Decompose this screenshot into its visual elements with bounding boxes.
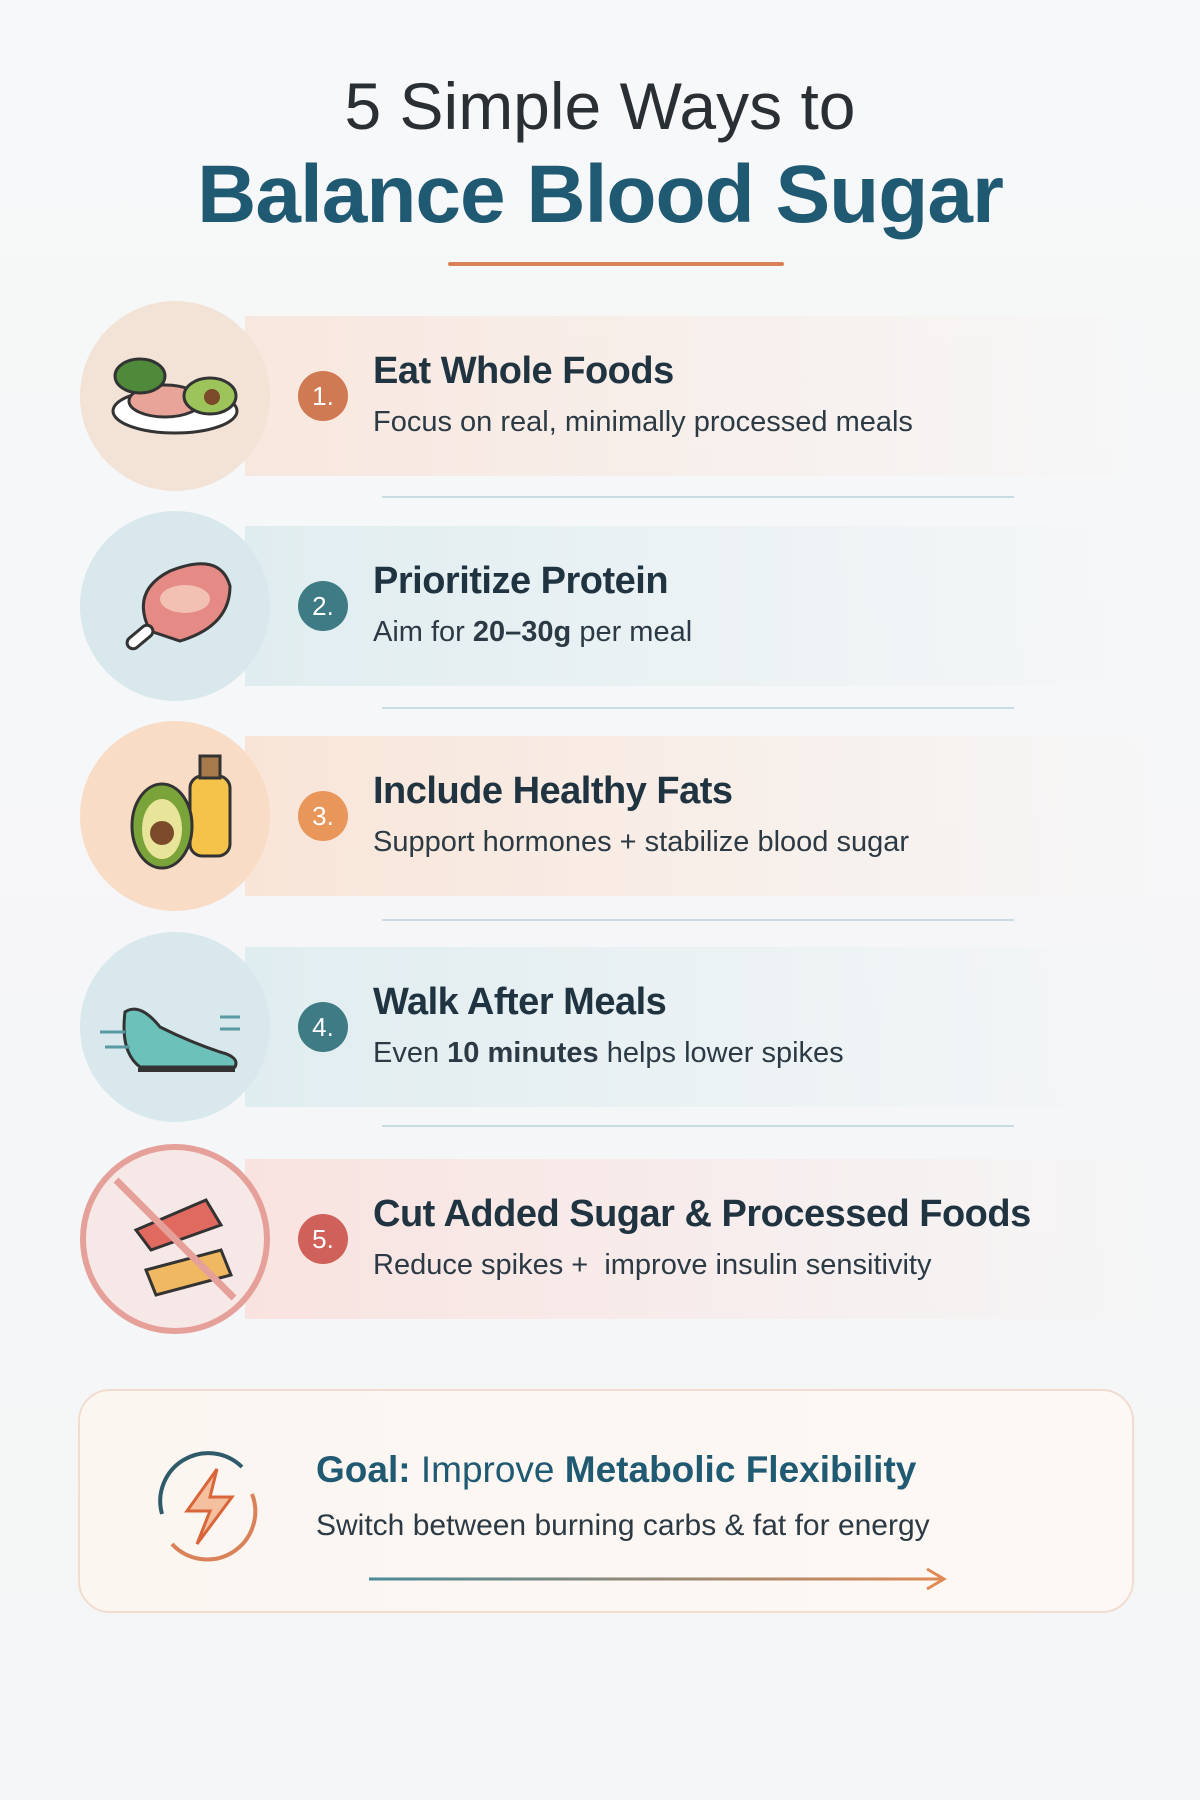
icon: energy cycle [158,1451,258,1562]
icon: protein steak [80,511,270,701]
badge 3: 3. [312,801,334,831]
badge 2: 2. [312,591,334,621]
badge 2 [298,581,348,631]
badge 4 [298,1002,348,1052]
row 2 [80,511,822,701]
title: Balance Blood Sugar [197,149,1003,240]
badge 1: 1. [312,381,334,411]
heading 5: Cut Added Sugar & Processed Foods [373,1193,1031,1235]
icon: sneaker [80,932,270,1122]
row 5 [80,1144,1031,1334]
row 3 [80,721,920,911]
title underline [448,262,784,266]
badge 4: 4. [312,1012,334,1042]
subtext 5: Reduce spikes + improve insulin sensitivity [373,1249,932,1281]
goal subtext: Switch between burning carbs & fat for energy [316,1509,930,1542]
icon: avocado and oil [80,721,270,911]
subtext 4: Even 10 minutes helps lower spikes [373,1037,844,1069]
subtext 1: Focus on real, minimally processed meals [373,406,913,438]
title: 5 Simple Ways to [344,69,856,143]
icon: no sugar [80,1144,270,1334]
arrow [369,1568,947,1590]
goal panel [78,1389,1134,1613]
row 1 [80,301,913,491]
icon: whole foods plate [80,301,270,491]
badge 1 [298,371,348,421]
row 4 [80,932,844,1122]
goal heading: Goal: Improve Metabolic Flexibility [316,1449,916,1490]
heading 4: Walk After Meals [373,981,666,1023]
subtext 2: Aim for 20–30g per meal [373,616,692,648]
title [197,69,1003,240]
badge 5: 5. [312,1224,334,1254]
heading 3: Include Healthy Fats [373,770,733,812]
badge 3 [298,791,348,841]
badge 5 [298,1214,348,1264]
heading 2: Prioritize Protein [373,560,668,602]
heading 1: Eat Whole Foods [373,350,674,392]
subtext 3: Support hormones + stabilize blood sugar [373,826,909,858]
